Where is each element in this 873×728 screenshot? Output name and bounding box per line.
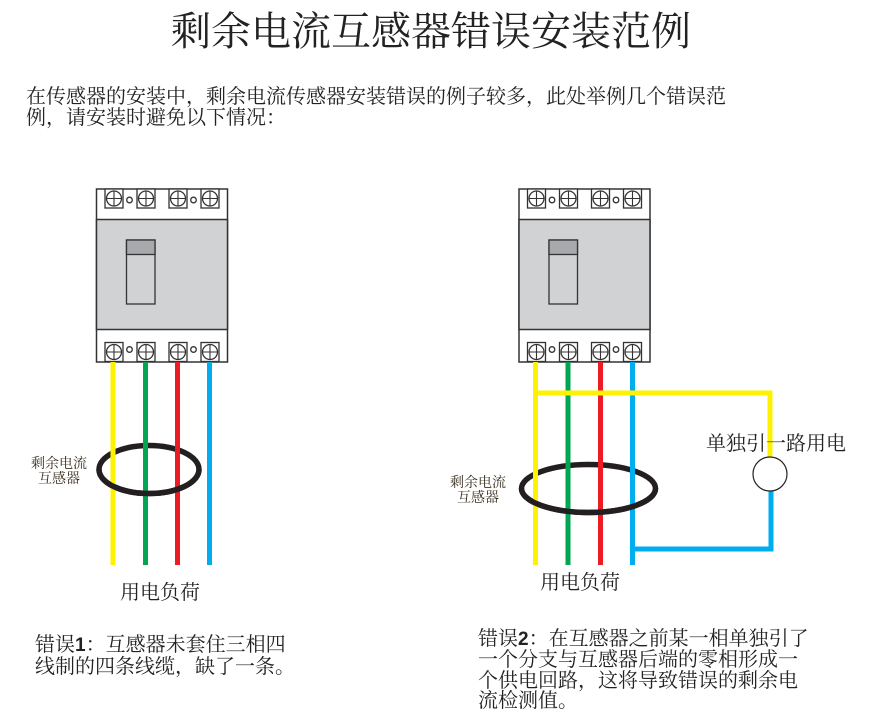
transformer ring 1 front (99, 470, 199, 494)
load label 2: 用电负荷 (540, 571, 620, 594)
load label 1: 用电负荷 (120, 581, 200, 604)
circuit breaker 2 (519, 189, 650, 362)
branch label: 单独引一路用电 (706, 432, 846, 455)
transformer ring 2 back (522, 464, 656, 512)
title: 剩余电流互感器错误安装范例 (171, 9, 691, 54)
caption: error 2: 流检测值。 (478, 689, 578, 712)
transformer ring 2 front (522, 488, 656, 512)
intro text: 在传感器的安装中，剩余电流传感器安装错误的例子较多，此处举例几个错误范 (26, 85, 726, 108)
transformer label 1 (31, 455, 87, 487)
diagram: error 1 (31, 189, 228, 604)
caption: error 2 (478, 627, 809, 712)
transformer label 2 (450, 474, 506, 506)
transformer label 2: 互感器 (457, 489, 499, 506)
load circle (753, 457, 787, 491)
caption: error 1: 错误1：互感器未套住三相四 (35, 633, 286, 656)
transformer label 1: 剩余电流 (31, 455, 87, 472)
transformer label 2: 剩余电流 (450, 474, 506, 491)
transformer ring 1 back (99, 446, 199, 494)
intro text: 例，请安装时避免以下情况： (26, 106, 286, 129)
caption: error 1 (35, 633, 295, 678)
circuit breaker 1 (96, 189, 228, 362)
caption: error 2: 一个分支与互感器后端的零相形成一 (478, 648, 798, 671)
caption: error 2: 个供电回路，这将导致错误的剩余电 (478, 669, 798, 692)
transformer label 1: 互感器 (38, 470, 80, 487)
wires 2 (536, 362, 632, 565)
intro text (26, 85, 726, 129)
caption: error 1: 线制的四条线缆，缺了一条。 (35, 655, 295, 678)
diagram: error 2 (450, 189, 846, 594)
branch wires (536, 393, 771, 549)
wires 1 (113, 362, 210, 565)
caption: error 2: 错误2：在互感器之前某一相单独引了 (478, 627, 809, 650)
